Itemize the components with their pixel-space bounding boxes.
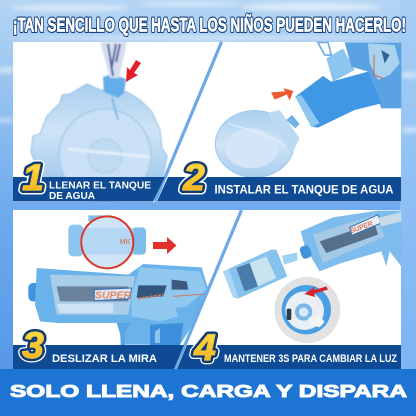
badge: number 1: 1	[22, 158, 44, 199]
diagonal divider	[175, 210, 242, 369]
label band: step 4	[177, 345, 401, 369]
illustration: light module and gun: SUPER	[349, 219, 375, 235]
badge: number 4: 4	[193, 328, 216, 369]
label text: step 2: INSTALAR EL TANQUE DE AGUA	[214, 182, 394, 196]
diagonal divider	[155, 42, 222, 202]
badge: number 2: 2	[182, 158, 205, 199]
illustration: tank and gun grip	[215, 42, 401, 177]
badge: number 2: 2	[182, 158, 205, 199]
panel: steps 3 and 4	[13, 210, 401, 369]
badge: number 3: 3	[22, 326, 44, 367]
label band: step 2	[157, 177, 401, 202]
badge: number 3: 3	[22, 326, 44, 367]
label text: step 3: DESLIZAR LA MIRA	[52, 353, 157, 365]
illustration: water tank being filled	[31, 42, 167, 201]
label band: step 1	[13, 177, 165, 202]
illustration: gun: SUPER	[95, 291, 132, 302]
badge: number 4: 4	[193, 328, 216, 369]
badge: number 2: 2	[182, 158, 205, 199]
badge: number 3: 3	[22, 326, 44, 367]
illustration: light module and gun	[223, 211, 401, 343]
illustration: scope: MK	[119, 237, 131, 246]
label text: step 1	[49, 180, 151, 202]
badge: number 1: 1	[22, 158, 44, 199]
illustration: gun	[28, 264, 208, 345]
badge: number 4: 4	[193, 328, 216, 369]
arrow: fill point	[126, 60, 141, 82]
bottom banner	[0, 369, 416, 416]
badge: number 1: 1	[22, 158, 44, 199]
banner slogan: SOLO LLENA, CARGA Y DISPARA	[10, 381, 407, 401]
arrow: slide scope	[153, 237, 176, 254]
label band: step 3	[13, 345, 184, 369]
illustration: scope	[68, 215, 146, 268]
label text: step 1: LLENAR EL TANQUE	[49, 180, 151, 192]
label text: step 1: DE AGUA	[49, 190, 95, 202]
arrow: insert tank	[271, 87, 293, 101]
panel: steps 1 and 2	[13, 42, 401, 202]
